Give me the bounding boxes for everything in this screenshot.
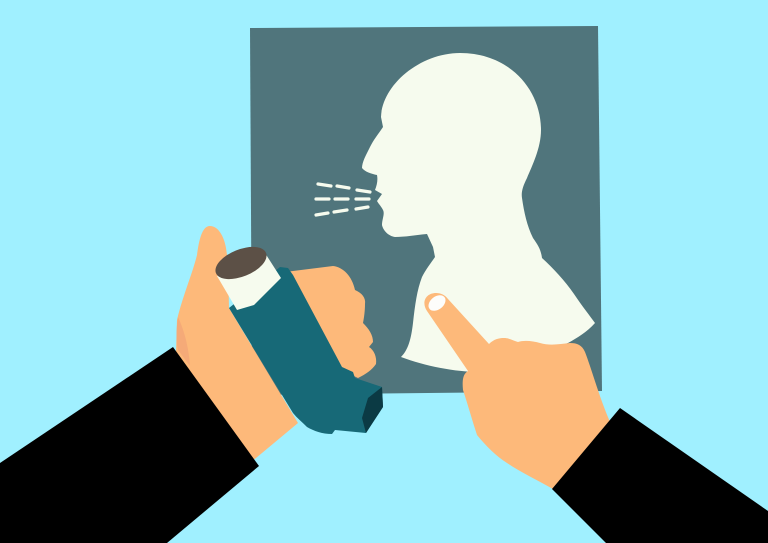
fingernail	[426, 292, 448, 314]
palm shadow	[176, 317, 190, 366]
inhaler canister	[217, 253, 281, 310]
left hand palm and thumb	[176, 226, 298, 470]
panel: x-ray sheet	[250, 26, 602, 395]
right sleeve	[552, 408, 768, 543]
canister top	[211, 240, 271, 286]
inhaler mouthpiece opening	[362, 387, 383, 433]
left sleeve	[0, 347, 259, 543]
head silhouette	[362, 53, 595, 372]
left hand fingers	[285, 266, 376, 378]
inhaler body	[229, 267, 383, 434]
breath dashes	[316, 184, 370, 215]
right hand pointing	[424, 293, 611, 489]
